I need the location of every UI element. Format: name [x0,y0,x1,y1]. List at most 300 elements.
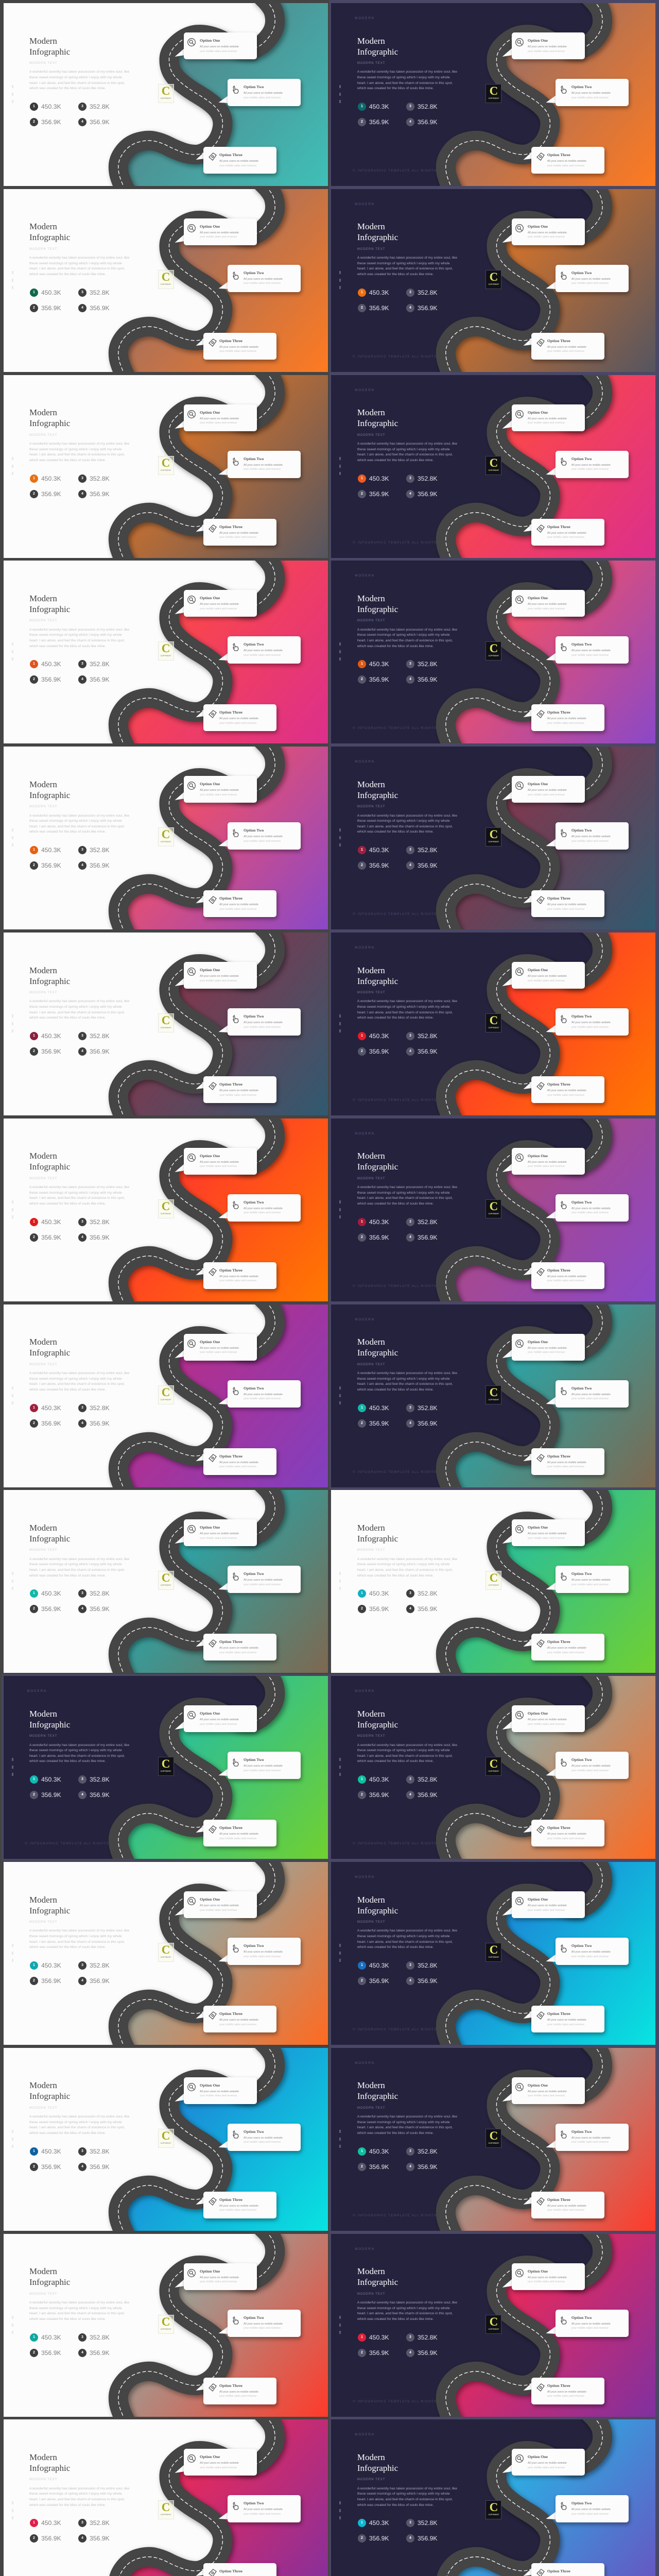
body text: A wonderful serenity has taken possession of my entire soul, like [357,999,457,1003]
card three: Option Three [219,1454,242,1459]
stats: 3 [81,477,83,480]
badge: COPYRIGHT [488,1027,499,1029]
card three: Option Three [547,2011,570,2016]
stats: 356.9K [90,862,110,869]
card three: All your users on mobile website [547,717,586,720]
card two [228,265,301,292]
card two: Option Two [244,828,264,833]
card one: All your users on mobile website [528,2090,567,2093]
title: Infographic [357,1162,398,1172]
card two: All your users on mobile website [244,464,283,467]
card three: All your users on mobile website [219,532,258,535]
stats: 3 [81,1777,83,1781]
title: Modern [357,2452,385,2462]
card one: All your users on mobile website [528,45,567,48]
card one: All your users on mobile website [200,789,239,792]
card three: Option Three [219,2011,242,2016]
card two: Option Two [244,84,264,89]
stats: 1 [361,662,363,666]
stats: 3 [81,848,83,852]
card three: Option Three [219,2383,242,2388]
stats: 2 [361,2536,363,2540]
badge: C [490,270,498,283]
stats: 1 [33,1777,35,1781]
card two: your mobile sales and revenue [571,654,609,657]
card two: Option Two [244,2501,264,2505]
card three: Option Three [547,2197,570,2202]
card one: All your users on mobile website [200,1347,239,1350]
card three [531,890,604,917]
body text: heart. I am alone, and feel the charm of existence in this spot, [357,81,453,85]
card two: All your users on mobile website [244,1951,283,1954]
stats: 356.9K [41,304,61,312]
body text: heart. I am alone, and feel the charm of existence in this spot, [357,1196,453,1200]
stats: 356.9K [90,1605,110,1613]
stats: 1 [361,2149,363,2153]
card one [512,590,585,617]
card one: All your users on mobile website [200,45,239,48]
stats: 356.9K [90,2349,110,2357]
body text: these sweet mornings of spring which I enjoy with my whole [357,633,450,637]
stats: 2 [33,1607,35,1611]
card one: All your users on mobile website [528,789,567,792]
card two: your mobile sales and revenue [571,468,609,471]
card three: your mobile sales and revenue [547,2023,584,2026]
body text: heart. I am alone, and feel the charm of existence in this spot, [357,1940,453,1944]
card two: All your users on mobile website [571,1021,611,1024]
stats: 352.8K [418,1032,438,1040]
stats: 450.3K [369,846,389,854]
title [357,2266,398,2287]
road [331,1118,655,1301]
body text: which was created for the bliss of souls like mine. [29,2131,106,2135]
card two [556,2310,629,2337]
card one: your mobile sales and revenue [528,1165,565,1168]
stats: 352.8K [90,1962,110,1969]
title: Infographic [357,2463,398,2473]
panel: slide 11 light maroon slate [3,933,327,1115]
stats: 3 [81,105,83,108]
card three: Option Three [547,2569,570,2573]
card one [512,2077,585,2104]
card one [512,1891,585,1918]
body text: these sweet mornings of spring which I enjoy with my whole [357,1005,450,1009]
stats: 1 [361,1406,363,1410]
stats: 356.9K [41,1234,61,1241]
stats: 4 [81,2351,83,2354]
badge: C [162,456,170,469]
card two: All your users on mobile website [571,2508,611,2511]
card three: your mobile sales and revenue [547,1279,584,1282]
card two [228,1194,301,1222]
card one: Option One [200,782,220,786]
stats: 356.9K [41,1048,61,1055]
title: Infographic [29,1534,70,1544]
card three [531,519,604,546]
panel: slide 17 light teal brown [3,1490,327,1673]
stats: 2 [361,492,363,496]
card one: All your users on mobile website [528,231,567,234]
stats: 356.9K [90,490,110,498]
card three: Option Three [547,896,570,901]
card three [531,147,604,174]
stats: 1 [33,291,35,294]
stats: 356.9K [369,862,389,869]
title: Modern [357,2080,385,2090]
body text: A wonderful serenity has taken possession of my entire soul, like [357,1557,457,1561]
card two: your mobile sales and revenue [571,2141,609,2144]
panel: slide 9 light pink purple [3,747,327,929]
body text: heart. I am alone, and feel the charm of existence in this spot, [29,1011,125,1014]
card one: Option One [528,596,548,600]
stats: 356.9K [90,2535,110,2542]
badge [485,2129,501,2148]
body text: heart. I am alone, and feel the charm of existence in this spot, [29,1196,125,1200]
card one: All your users on mobile website [200,975,239,978]
card three: All your users on mobile website [219,1461,258,1464]
subtitle: MODERN TEXT [29,805,58,808]
body text: these sweet mornings of spring which I enjoy with my whole [29,2492,122,2496]
card three: your mobile sales and revenue [547,1093,584,1096]
subtitle: MODERN TEXT [357,1177,385,1180]
stats: 356.9K [369,118,389,126]
stats: 352.8K [90,2334,110,2341]
card two: your mobile sales and revenue [571,2327,609,2330]
card one: your mobile sales and revenue [528,793,565,796]
badge [158,1943,174,1962]
stats: 450.3K [41,846,61,854]
stats [358,1404,430,1428]
header label: MODERN [355,1132,375,1136]
stats: 4 [409,1793,411,1797]
stats: 4 [81,863,83,867]
stats: 352.8K [418,289,438,296]
body text [29,1557,129,1579]
body text: heart. I am alone, and feel the charm of existence in this spot, [357,453,453,456]
stats [30,2333,102,2357]
body text: which was created for the bliss of souls like mine. [29,1388,106,1392]
title [357,2452,398,2473]
subtitle: MODERN TEXT [357,991,385,994]
card two: your mobile sales and revenue [571,1025,609,1028]
card three: All your users on mobile website [547,1461,586,1464]
body text [357,2300,457,2322]
badge [158,1199,174,1218]
card one [184,1891,257,1918]
card two [228,1752,301,1779]
body text: heart. I am alone, and feel the charm of existence in this spot, [357,1011,453,1014]
title: Modern [357,1895,385,1904]
stats: 1 [33,2335,35,2339]
stats: 450.3K [41,1962,61,1969]
header label: MODERN [355,1876,375,1879]
stats: 356.9K [90,1420,110,1427]
card three: Option Three [547,2383,570,2388]
title [357,593,398,615]
stats: 450.3K [369,1776,389,1783]
panel: slide 6 dark pink [331,375,655,558]
stats [30,1775,102,1799]
subtitle: MODERN TEXT [357,619,385,622]
card one [512,2263,585,2290]
card two: your mobile sales and revenue [571,1955,609,1958]
stats: 1 [33,2521,35,2524]
badge: COPYRIGHT [488,2514,499,2516]
card two [556,1752,629,1779]
subtitle: MODERN TEXT [29,1177,58,1180]
card three [531,2563,604,2576]
stats: 2 [361,1049,363,1053]
title: Infographic [357,2277,398,2287]
card three: All your users on mobile website [547,532,586,535]
card three: your mobile sales and revenue [219,1093,256,1096]
card three [203,2006,276,2032]
badge: COPYRIGHT [488,1770,499,1772]
stats: 356.9K [41,1420,61,1427]
stats: 450.3K [369,1218,389,1226]
body text: heart. I am alone, and feel the charm of existence in this spot, [29,453,125,456]
card two: All your users on mobile website [571,92,611,95]
stats: 4 [81,2536,83,2540]
stats: 356.9K [369,490,389,498]
stats: 3 [409,2521,411,2524]
card two: Option Two [244,2129,264,2134]
stats: 356.9K [369,2163,389,2171]
card two: Option Two [244,2315,264,2320]
stats [358,846,430,870]
card two: Option Two [244,1386,264,1391]
title: Infographic [29,2091,70,2101]
card three [531,704,604,731]
body text: A wonderful serenity has taken possession of my entire soul, like [29,814,129,818]
body text: which was created for the bliss of souls like mine. [29,1574,106,1578]
stats [30,660,102,684]
footer: © INFOGRAPHIC TEMPLATE ALL RIGHTS [353,1471,437,1474]
card two: All your users on mobile website [244,92,283,95]
road [331,2419,655,2576]
body text: A wonderful serenity has taken possession of my entire soul, like [29,1557,129,1561]
card two: All your users on mobile website [571,835,611,838]
stats: 4 [81,1235,83,1239]
subtitle: MODERN TEXT [29,2107,58,2110]
title [29,408,70,428]
card two: Option Two [571,2501,592,2505]
body text [29,2486,129,2508]
footer: © INFOGRAPHIC TEMPLATE ALL RIGHTS [25,1842,109,1845]
subtitle: MODERN TEXT [357,1549,385,1552]
stats [358,660,430,684]
card one: your mobile sales and revenue [200,421,237,425]
title: Infographic [357,232,398,242]
card two [228,1938,301,1965]
card one: Option One [528,2454,548,2459]
body text: heart. I am alone, and feel the charm of existence in this spot, [357,1754,453,1758]
stats: 352.8K [90,1404,110,1412]
card three: All your users on mobile website [219,2205,258,2208]
stats: 2 [33,306,35,310]
card one [184,218,257,245]
badge [485,270,501,289]
card one: Option One [200,1340,220,1344]
stats [358,1961,430,1985]
road [3,2234,327,2417]
card two: Option Two [244,1757,264,1762]
road [331,1676,655,1859]
card one: your mobile sales and revenue [200,235,237,239]
body text: which was created for the bliss of souls like mine. [29,459,106,462]
card one: Option One [200,1154,220,1158]
body text: which was created for the bliss of souls like mine. [357,1388,433,1392]
subtitle: MODERN TEXT [357,62,385,65]
road [3,933,327,1115]
subtitle: MODERN TEXT [357,1921,385,1924]
stats: 356.9K [90,676,110,683]
road [3,1490,327,1673]
stats: 352.8K [90,1776,110,1783]
subtitle: MODERN TEXT [29,2293,58,2296]
card three: All your users on mobile website [547,2205,586,2208]
panel: slide 5 light orange gray [3,375,327,558]
body text: heart. I am alone, and feel the charm of existence in this spot, [29,2126,125,2129]
stats: 352.8K [418,1218,438,1226]
body text: which was created for the bliss of souls like mine. [357,1202,433,1206]
card one: Option One [200,2083,220,2088]
body text: which was created for the bliss of souls like mine. [357,87,433,90]
stats [358,2147,430,2171]
title [29,779,70,801]
stats: 4 [81,120,83,124]
card one: All your users on mobile website [200,2276,239,2279]
body text: which was created for the bliss of souls like mine. [357,645,433,648]
card two [556,1566,629,1593]
badge [158,1385,174,1404]
card two: your mobile sales and revenue [571,2513,609,2516]
panel: slide 27 light crimson purple [3,2419,327,2576]
title [357,36,398,57]
card two: All your users on mobile website [571,1207,611,1210]
card one: All your users on mobile website [528,1161,567,1164]
body text: these sweet mornings of spring which I enjoy with my whole [29,1935,122,1938]
stats [30,103,110,126]
stats: 356.9K [418,1977,438,1985]
stats: 356.9K [418,490,438,498]
body text: these sweet mornings of spring which I enjoy with my whole [357,2121,450,2124]
footer: © INFOGRAPHIC TEMPLATE ALL RIGHTS [353,1285,437,1288]
badge: C [162,1757,170,1770]
stats: 1 [361,1034,363,1038]
card three: All your users on mobile website [219,1833,258,1836]
road [331,2048,655,2231]
card three: your mobile sales and revenue [219,1651,256,1654]
stats: 2 [361,1607,363,1611]
stats: 356.9K [41,676,61,683]
panel: slide 19 dark green [3,1676,327,1859]
road [331,189,617,372]
card one: All your users on mobile website [528,417,567,420]
card one: your mobile sales and revenue [200,1351,237,1354]
body text: A wonderful serenity has taken possession of my entire soul, like [29,2487,129,2490]
card two: Option Two [244,1571,264,1576]
card two: Option Two [571,1757,592,1762]
card one: your mobile sales and revenue [528,1537,565,1540]
body text: A wonderful serenity has taken possession of my entire soul, like [29,442,129,446]
card two: your mobile sales and revenue [571,840,609,843]
card two [556,1380,629,1408]
road [4,375,290,558]
title [29,1522,70,1544]
title [29,1708,70,1730]
body text: heart. I am alone, and feel the charm of existence in this spot, [29,1382,125,1386]
title: Infographic [29,46,70,57]
card one: All your users on mobile website [200,1718,239,1721]
title [29,222,70,242]
stats: 4 [409,2165,411,2168]
body text: heart. I am alone, and feel the charm of existence in this spot, [29,1754,125,1758]
footer: © INFOGRAPHIC TEMPLATE ALL RIGHTS [353,727,437,730]
badge: C [162,1014,170,1027]
road [331,933,655,1115]
stats: 1 [33,1963,35,1967]
panel: slide 21 light tan orange [3,1862,327,2045]
body text [29,70,129,90]
stats: 4 [409,2351,411,2354]
card one: your mobile sales and revenue [200,1537,237,1540]
card three: Option Three [219,1825,242,1830]
road [331,375,655,558]
stats: 1 [361,1963,363,1967]
stats: 450.3K [41,660,61,668]
card three: Option Three [547,338,570,343]
stats: 2 [33,120,35,124]
stats: 4 [409,1049,411,1053]
card two [228,1008,301,1036]
title [357,1894,398,1916]
badge: COPYRIGHT [161,1213,171,1215]
body text: A wonderful serenity has taken possession of my entire soul, like [29,2115,129,2119]
card two: All your users on mobile website [244,1579,283,1582]
card two [228,1380,301,1408]
card three: Option Three [547,1825,570,1830]
body text: A wonderful serenity has taken possession of my entire soul, like [357,70,457,74]
card two [228,451,301,478]
card one: your mobile sales and revenue [528,2280,565,2283]
stats [30,289,110,312]
card one: All your users on mobile website [528,2462,567,2465]
card two: your mobile sales and revenue [244,1025,281,1028]
card two: your mobile sales and revenue [244,1769,281,1772]
stats: 4 [81,1607,83,1611]
body text: heart. I am alone, and feel the charm of existence in this spot, [29,81,125,85]
card three [531,1448,604,1475]
card two: Option Two [244,270,264,275]
panel: slide 8 dark pink purple [331,561,655,743]
body text: these sweet mornings of spring which I enjoy with my whole [357,1749,450,1752]
title: Modern [357,1523,385,1533]
stats: 356.9K [90,1977,110,1985]
card two [228,636,301,664]
badge: COPYRIGHT [161,2142,171,2144]
stats: 356.9K [418,304,438,312]
badge [158,1757,174,1776]
title: Modern [357,965,385,975]
stats: 352.8K [90,1032,110,1040]
stats: 2 [33,1793,35,1797]
card two: All your users on mobile website [571,2137,611,2140]
title: Modern [29,222,57,231]
card one [184,590,257,617]
stats: 2 [361,1421,363,1425]
footer: © INFOGRAPHIC TEMPLATE ALL RIGHTS [353,2214,437,2217]
